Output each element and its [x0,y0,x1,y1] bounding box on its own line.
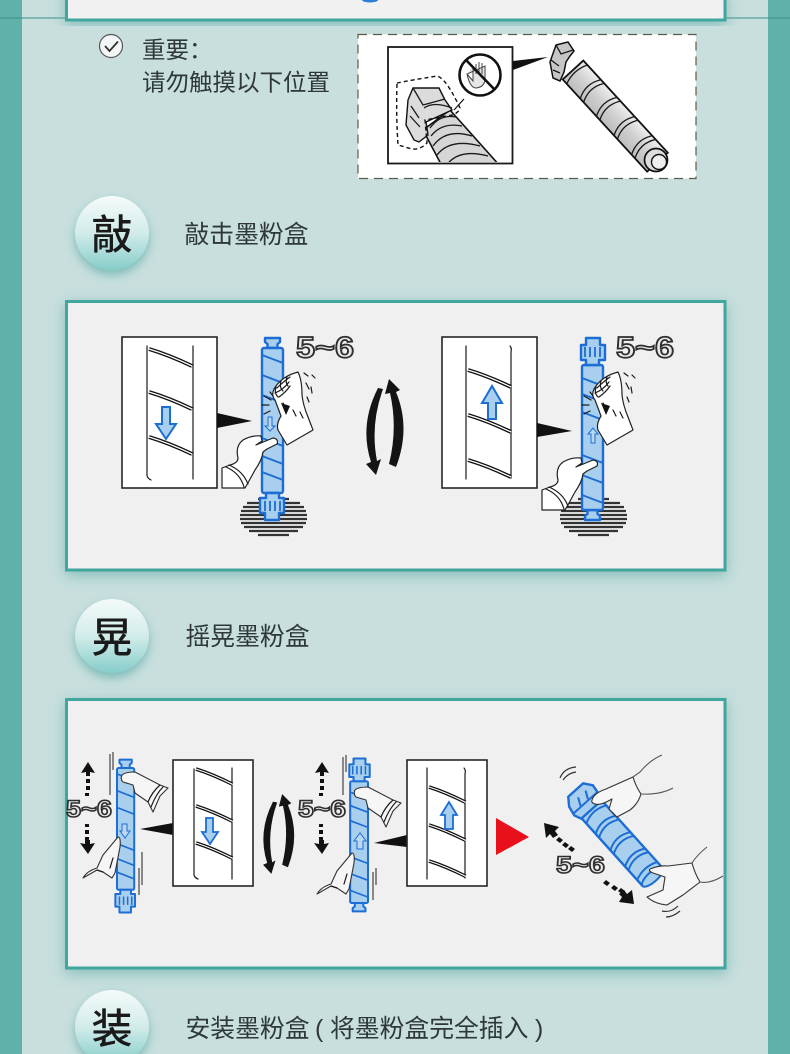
rotation arrows [366,379,404,475]
heading: install toner: 安装墨粉盒 [186,1015,310,1043]
icon: blue dot remnant [362,0,378,2]
icon: red arrow [496,818,529,855]
illustration: toner cartridge [550,42,668,172]
icon: no touching [460,54,500,96]
pointer [217,413,252,428]
hands tapping [222,372,315,488]
right side band [768,0,790,1054]
count label: 5~6 [616,332,674,364]
motion arrows left [80,762,95,854]
motion ticks [343,755,376,900]
panel: previous step bottom edge [66,0,725,20]
icon: check mark [100,34,122,58]
top rule [0,17,790,19]
toner: blue vertical [260,338,284,520]
left side band [0,0,22,1054]
small arrow on toner [265,417,275,431]
hand lower left [83,837,120,878]
panel: tapping the toner [66,302,725,570]
pointer [537,423,572,437]
pointer [513,57,548,70]
heading: install toner: ( [315,1016,324,1043]
hands tapping [542,372,635,510]
step badge: install [75,990,149,1054]
step badge: shake: 晃 [92,615,132,661]
toner: blue vertical left [115,760,135,912]
count label: 5~6 [298,796,346,823]
count label: 5~6 [296,332,354,364]
step badge: install: 装 [92,1006,132,1052]
text: important note: 重要： [142,37,212,63]
heading: install toner: ) [535,1016,543,1043]
inset: spiral arrow up [442,337,537,488]
small arrow on toner [120,824,130,838]
inset: spiral arrow down [173,760,253,886]
count label: 5~6 [556,852,605,879]
hand lower middle [317,853,354,894]
text: important note [142,37,330,96]
hand upper middle [354,787,401,827]
toner: blue diagonal [562,779,669,892]
inset: spiral arrow up [407,760,487,886]
small arrow on toner [588,428,598,443]
heading: install toner: 将墨粉盒完全插入 [330,1015,528,1043]
step badge: tap: 敲 [92,212,132,258]
hand lower right [647,847,723,905]
step badge: shake [75,599,149,673]
count label: 5~6 [66,796,112,823]
panel: do not touch illustration [358,34,696,178]
hand upper left [121,772,168,812]
step badge: tap [75,196,149,270]
shadow ellipse [240,499,307,535]
motion ticks [110,752,142,895]
motion arrows middle [314,762,329,854]
motion arrows diagonal [544,823,634,904]
inset: close-up of toner end [388,47,512,166]
hand upper right [592,755,673,817]
toner: blue inverted [581,338,605,520]
heading: tap toner: 敲击墨粉盒 [184,221,309,249]
inset: spiral arrow down [122,337,217,488]
text: important note: 请勿触摸以下位置 [142,70,330,96]
pointer [140,823,173,835]
heading: shake toner: 摇晃墨粉盒 [186,623,310,651]
shadow ellipse [560,499,627,535]
small arrow on toner [354,833,366,849]
rotation arrows [263,794,294,874]
pointer [374,835,407,847]
panel: shaking the toner [66,700,725,968]
toner: blue inverted middle [349,759,370,911]
motion arcs [560,767,680,917]
